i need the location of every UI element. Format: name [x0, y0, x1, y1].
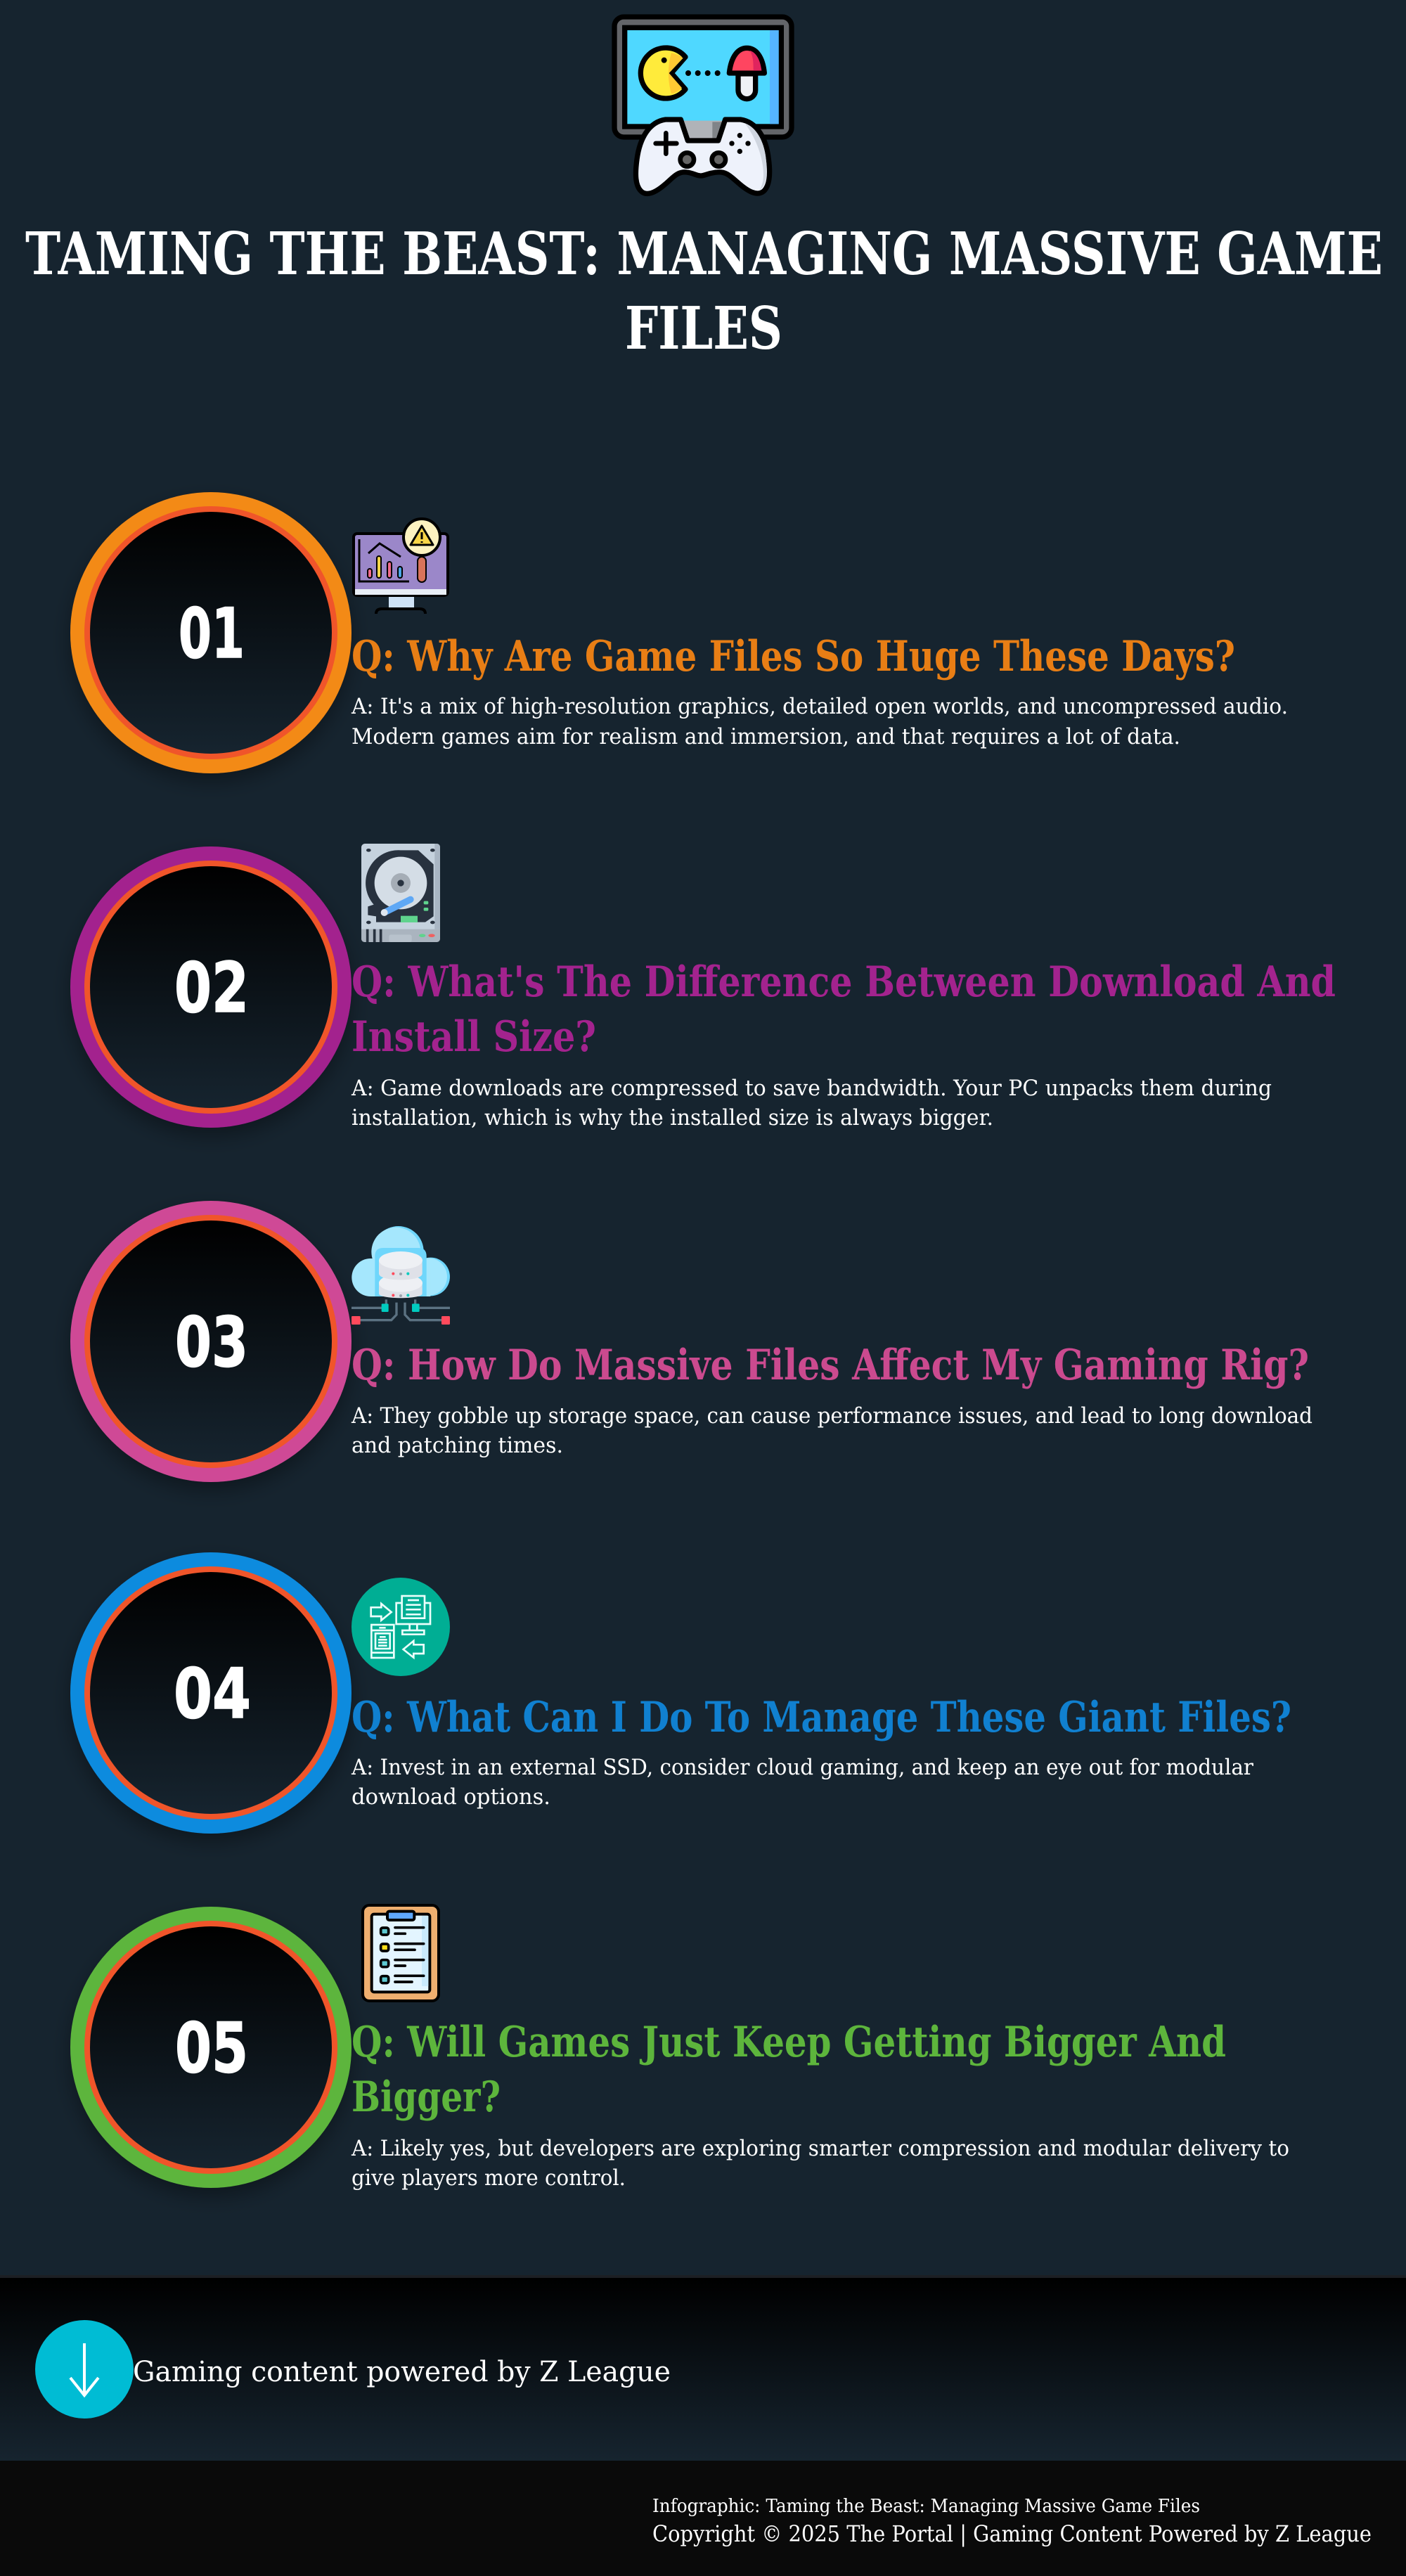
answer text: A: They gobble up storage space, can cause performance issues, and lead to long download — [351, 1403, 1313, 1429]
number badge 01 — [70, 492, 352, 773]
banner text: Gaming content powered by Z League — [133, 2356, 671, 2388]
panel: question 03 — [70, 1201, 1313, 1482]
number badge 04 — [70, 1552, 352, 1834]
answer text — [351, 1755, 1253, 1810]
answer text: and patching times. — [352, 1433, 563, 1458]
question text: Q: Will Games Just Keep Getting Bigger And — [352, 2018, 1226, 2067]
number badge 02: 02 — [174, 948, 249, 1029]
panel: question 02 — [70, 844, 1336, 1131]
icon: cloud database — [352, 1226, 450, 1325]
question text: Bigger? — [352, 2073, 501, 2122]
number badge 02 — [70, 846, 352, 1128]
icon: hard drive — [361, 844, 440, 942]
footer — [0, 2461, 1406, 2576]
answer text — [351, 694, 1288, 749]
question text — [352, 2018, 1226, 2122]
answer text: installation, which is why the installed size is always bigger. — [352, 1105, 993, 1131]
header icon: game monitor and controller — [614, 17, 792, 193]
panel: question 05 — [70, 1905, 1289, 2191]
answer text: download options. — [352, 1784, 550, 1810]
answer text: A: Game downloads are compressed to save bandwidth. Your PC unpacks them during — [351, 1076, 1272, 1101]
number badge 05 — [70, 1907, 352, 2188]
number badge 03 — [70, 1201, 352, 1482]
icon: file transfer between computer and phone — [352, 1578, 450, 1676]
answer text: Modern games aim for realism and immersion, and that requires a lot of data. — [352, 724, 1180, 749]
title — [25, 219, 1383, 363]
number badge 04: 04 — [174, 1654, 251, 1734]
answer text — [351, 1076, 1272, 1131]
title: FILES — [625, 294, 782, 363]
icon: monitor with chart and warning magnifier — [354, 519, 448, 614]
number badge 03: 03 — [175, 1303, 248, 1383]
question text: Q: Why Are Game Files So Huge These Days? — [352, 632, 1235, 681]
number badge 05: 05 — [175, 2009, 248, 2089]
answer text — [351, 1403, 1313, 1458]
answer text — [351, 2136, 1289, 2191]
panel: question 01 — [70, 492, 1288, 773]
answer text: A: Likely yes, but developers are exploring smarter compression and modular delivery to — [351, 2136, 1289, 2161]
answer text: A: Invest in an external SSD, consider cloud gaming, and keep an eye out for modular — [351, 1755, 1253, 1780]
panel: question 04 — [70, 1552, 1291, 1834]
number badge 01: 01 — [179, 594, 245, 674]
question text: Install Size? — [352, 1012, 596, 1062]
answer text: give players more control. — [352, 2165, 626, 2191]
footer: Infographic: Taming the Beast: Managing Massive Game Files — [652, 2496, 1200, 2517]
question text — [352, 958, 1336, 1062]
icon: clipboard checklist — [363, 1905, 439, 2001]
icon: down arrow — [35, 2320, 134, 2419]
answer text: A: It's a mix of high-resolution graphics, detailed open worlds, and uncompressed audio. — [351, 694, 1288, 719]
banner: powered by — [0, 2275, 1406, 2461]
